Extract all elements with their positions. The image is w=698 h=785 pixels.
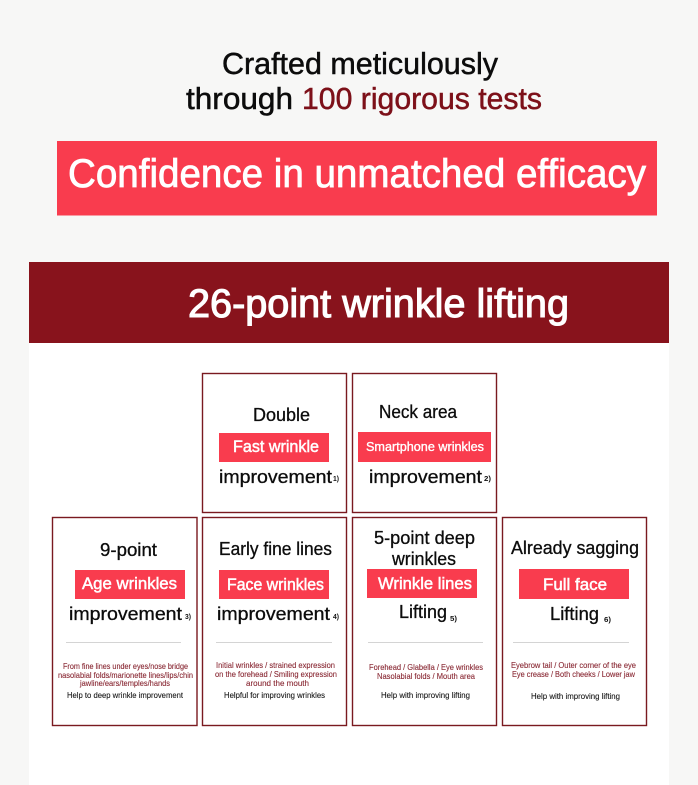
title: through xyxy=(186,81,293,116)
card: 9-point age wrinkles: 3) xyxy=(185,614,191,621)
card: early fine lines face wrinkles: Initial wrinkles / strained expression xyxy=(216,660,335,670)
white content panel xyxy=(29,343,669,785)
card: early fine lines face wrinkles: on the forehead / Smiling expression xyxy=(215,669,337,679)
card: early fine lines face wrinkles: Early fine lines xyxy=(219,539,332,559)
card: double fast wrinkle improvement: Fast wrinkle xyxy=(233,437,319,456)
card: early fine lines face wrinkles: improvement xyxy=(217,604,330,624)
card: already sagging full face: Eye crease / Both cheeks / Lower jaw xyxy=(512,669,636,679)
card: 9-point age wrinkles: Help to deep wrinkle improvement xyxy=(67,690,184,700)
card: already sagging full face: Already sagging xyxy=(511,538,639,558)
card: already sagging full face: Eyebrow tail / Outer corner of the eye xyxy=(511,660,636,670)
card: neck area smartphone wrinkles: Neck area xyxy=(379,402,458,422)
heading band: 26-point wrinkle lifting: 26-point wrinkle lifting xyxy=(188,282,569,326)
card: already sagging full face: Help with improving lifting xyxy=(531,691,620,701)
card: neck area smartphone wrinkles xyxy=(352,374,496,512)
banner: confidence: Confidence in unmatched efficacy xyxy=(68,152,646,196)
card: already sagging full face: Full face xyxy=(543,575,607,594)
banner: confidence xyxy=(57,141,657,216)
card: 9-point age wrinkles: 9-point xyxy=(100,540,157,560)
card: 5-point deep wrinkles: Wrinkle lines xyxy=(378,574,472,593)
card: 5-point deep wrinkles: Lifting xyxy=(399,602,447,622)
card: 5-point deep wrinkles: wrinkles xyxy=(391,549,456,569)
card: already sagging full face xyxy=(502,518,646,726)
card: neck area smartphone wrinkles: 2) xyxy=(484,476,491,483)
card: 5-point deep wrinkles: 5) xyxy=(450,616,457,623)
card: 5-point deep wrinkles: Help with improving lifting xyxy=(381,690,470,700)
title: Crafted meticulously xyxy=(222,46,498,81)
card: early fine lines face wrinkles: Face wrinkles xyxy=(227,575,324,594)
card: 9-point age wrinkles: nasolabial folds/marionette lines/lips/chin xyxy=(58,670,193,680)
card: already sagging full face: Lifting xyxy=(550,604,599,624)
card: 9-point age wrinkles: improvement xyxy=(69,604,182,624)
card: 9-point age wrinkles xyxy=(52,518,197,726)
card: early fine lines face wrinkles xyxy=(202,518,346,726)
card: 5-point deep wrinkles: 5-point deep xyxy=(374,528,475,548)
card: 9-point age wrinkles: jawline/ears/temples/hands xyxy=(79,678,170,688)
card: 9-point age wrinkles: From fine lines under eyes/nose bridge xyxy=(63,661,188,671)
card: neck area smartphone wrinkles: Smartphone wrinkles xyxy=(366,440,484,454)
card: double fast wrinkle improvement: 1) xyxy=(333,476,339,483)
card: double fast wrinkle improvement: improvement xyxy=(219,467,332,487)
card: double fast wrinkle improvement xyxy=(202,374,346,512)
card: 5-point deep wrinkles: Forehead / Glabella / Eye wrinkles xyxy=(369,662,483,672)
heading band: 26-point wrinkle lifting xyxy=(29,262,669,343)
card: double fast wrinkle improvement: Double xyxy=(253,405,310,425)
card: already sagging full face: 6) xyxy=(604,617,611,624)
card: 5-point deep wrinkles xyxy=(352,518,496,726)
title xyxy=(186,46,542,116)
card: early fine lines face wrinkles: Helpful for improving wrinkles xyxy=(224,690,325,700)
card: neck area smartphone wrinkles: improvement xyxy=(369,467,482,487)
card: 9-point age wrinkles: Age wrinkles xyxy=(82,574,177,593)
title: 100 rigorous tests xyxy=(302,81,542,116)
card: 5-point deep wrinkles: Nasolabial folds / Mouth area xyxy=(377,671,475,681)
card: early fine lines face wrinkles: around the mouth xyxy=(246,678,309,688)
card: early fine lines face wrinkles: 4) xyxy=(333,614,339,621)
